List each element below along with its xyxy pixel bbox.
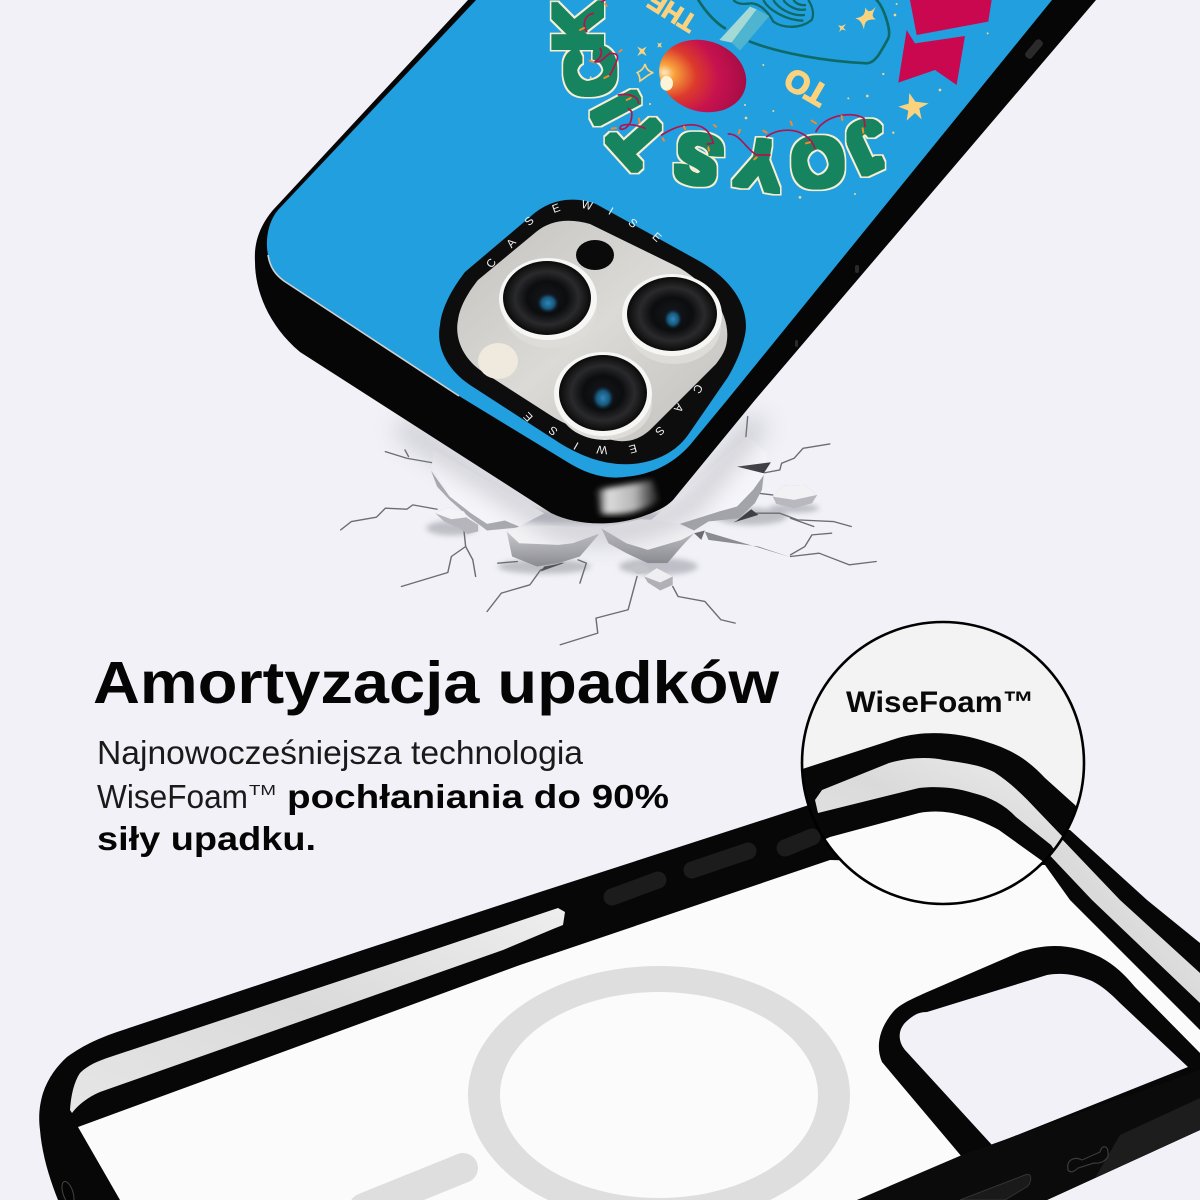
phone contact shadow bbox=[400, 420, 760, 532]
power button bbox=[960, 1174, 1031, 1200]
top-left slab bbox=[432, 450, 544, 527]
crack lines bbox=[341, 417, 876, 645]
small left rock bbox=[435, 507, 478, 534]
trademark: TM bbox=[249, 783, 276, 799]
callout label: WiseFoam™ bbox=[846, 686, 1034, 719]
joystick ball bbox=[659, 40, 746, 112]
speaker port bbox=[1068, 1147, 1108, 1172]
CASEWISE ring text: S bbox=[523, 215, 537, 229]
camera cut-out frame bbox=[879, 946, 1200, 1157]
centre-right chunk bbox=[601, 519, 694, 563]
CASEWISE ring text: C bbox=[690, 382, 704, 395]
right foam gap bbox=[1040, 835, 1200, 1003]
camera ring bbox=[439, 200, 746, 464]
CASEWISE ring text: E bbox=[551, 202, 562, 216]
ribbon lower bbox=[898, 30, 965, 85]
camera plateau bbox=[457, 221, 727, 441]
JOYSTICK lettering: O bbox=[785, 120, 850, 204]
CASEWISE ring text: C bbox=[485, 257, 499, 270]
dark crack shadow bbox=[541, 462, 771, 571]
lens 2 bbox=[622, 274, 722, 364]
string lights bbox=[580, 0, 865, 159]
CASEWISE ring text: S bbox=[626, 217, 639, 231]
magnifier callout: WiseFoam bbox=[800, 620, 1086, 906]
JOYSTICK lettering: Y bbox=[731, 123, 789, 205]
volume buttons bbox=[612, 837, 812, 897]
top phone with blue printed case bbox=[255, 0, 1096, 523]
JOYSTICK lettering: C bbox=[549, 41, 633, 103]
CASEWISE ring text bbox=[485, 199, 704, 455]
ribbon upper bbox=[910, 0, 992, 35]
CASEWISE ring text: E bbox=[627, 441, 638, 455]
soft shadows under rubble bbox=[426, 504, 819, 575]
lower side rail bbox=[857, 1070, 1200, 1200]
side buttons bbox=[795, 38, 1044, 347]
CASEWISE ring text: A bbox=[671, 401, 685, 414]
centre-left chunk bbox=[507, 526, 598, 566]
CASEWISE ring text: S bbox=[547, 423, 560, 437]
bumper highlight bbox=[596, 480, 660, 514]
rail shading bbox=[1095, 1098, 1200, 1178]
round rock bbox=[773, 485, 817, 508]
description line 3 bold: siły upadku. bbox=[97, 820, 316, 857]
top-left slab edge bbox=[431, 471, 521, 531]
ball highlight bbox=[660, 76, 673, 91]
camera cut-out opening bbox=[900, 974, 1188, 1145]
microphone hole bbox=[576, 240, 614, 270]
cracked ground impact bbox=[341, 417, 876, 645]
black frame silhouette bbox=[39, 805, 1200, 1200]
MagSafe alignment bar bbox=[364, 1168, 463, 1200]
JOYSTICK lettering: J bbox=[834, 104, 901, 189]
CASEWISE ring text: W bbox=[580, 199, 594, 213]
joystick stick bbox=[719, 7, 757, 43]
lens 3 bbox=[554, 352, 652, 440]
description text bbox=[97, 734, 669, 857]
magnifier ring bbox=[802, 622, 1084, 904]
CASEWISE ring text: W bbox=[596, 443, 608, 455]
left port bbox=[60, 1180, 76, 1200]
TO label: TO bbox=[778, 60, 834, 114]
case black bumper bbox=[255, 0, 1096, 523]
lens 1 bbox=[499, 258, 597, 348]
left foam gap bbox=[70, 908, 565, 1113]
crack wedge bbox=[705, 532, 791, 557]
joystick base outline bbox=[698, 0, 889, 63]
JOYSTICK lettering: I bbox=[578, 81, 654, 134]
description line 2 bold: pochłaniania do 90% bbox=[287, 778, 669, 815]
clear interior bbox=[78, 860, 1200, 1200]
confetti dots bbox=[590, 3, 989, 199]
CASEWISE ring text: S bbox=[652, 423, 666, 437]
joystick knob rings bbox=[733, 0, 813, 27]
JOYSTICK lettering: T bbox=[597, 98, 681, 180]
MagSafe ring bbox=[468, 966, 850, 1200]
CASEWISE ring text: E bbox=[522, 409, 536, 423]
CASEWISE ring text: I bbox=[572, 439, 581, 451]
JOYSTICK lettering: K bbox=[540, 2, 616, 52]
panel edge reflection bbox=[268, 255, 459, 396]
CASEWISE ring text: A bbox=[505, 237, 519, 250]
magnified corner bbox=[803, 733, 1076, 865]
blue back panel bbox=[267, 0, 1052, 478]
right slab bbox=[651, 437, 767, 524]
right slab edge bbox=[680, 475, 764, 531]
CASEWISE ring text: E bbox=[649, 231, 663, 245]
description line 1: Najnowocześniejsza technologia bbox=[97, 734, 584, 771]
flash bbox=[478, 343, 518, 379]
diamond outline bbox=[637, 64, 653, 81]
stars bbox=[637, 7, 929, 121]
CASEWISE ring text: I bbox=[606, 206, 615, 218]
JOYSTICK lettering: S bbox=[667, 116, 730, 202]
small lower rocks bbox=[630, 563, 673, 590]
JOYSTICK lettering bbox=[540, 2, 901, 205]
bottom transparent case bbox=[39, 805, 1200, 1200]
title: Amortyzacja upadków bbox=[93, 650, 779, 716]
description line 2 regular: WiseFoam bbox=[97, 778, 248, 815]
printed artwork bbox=[540, 0, 992, 205]
